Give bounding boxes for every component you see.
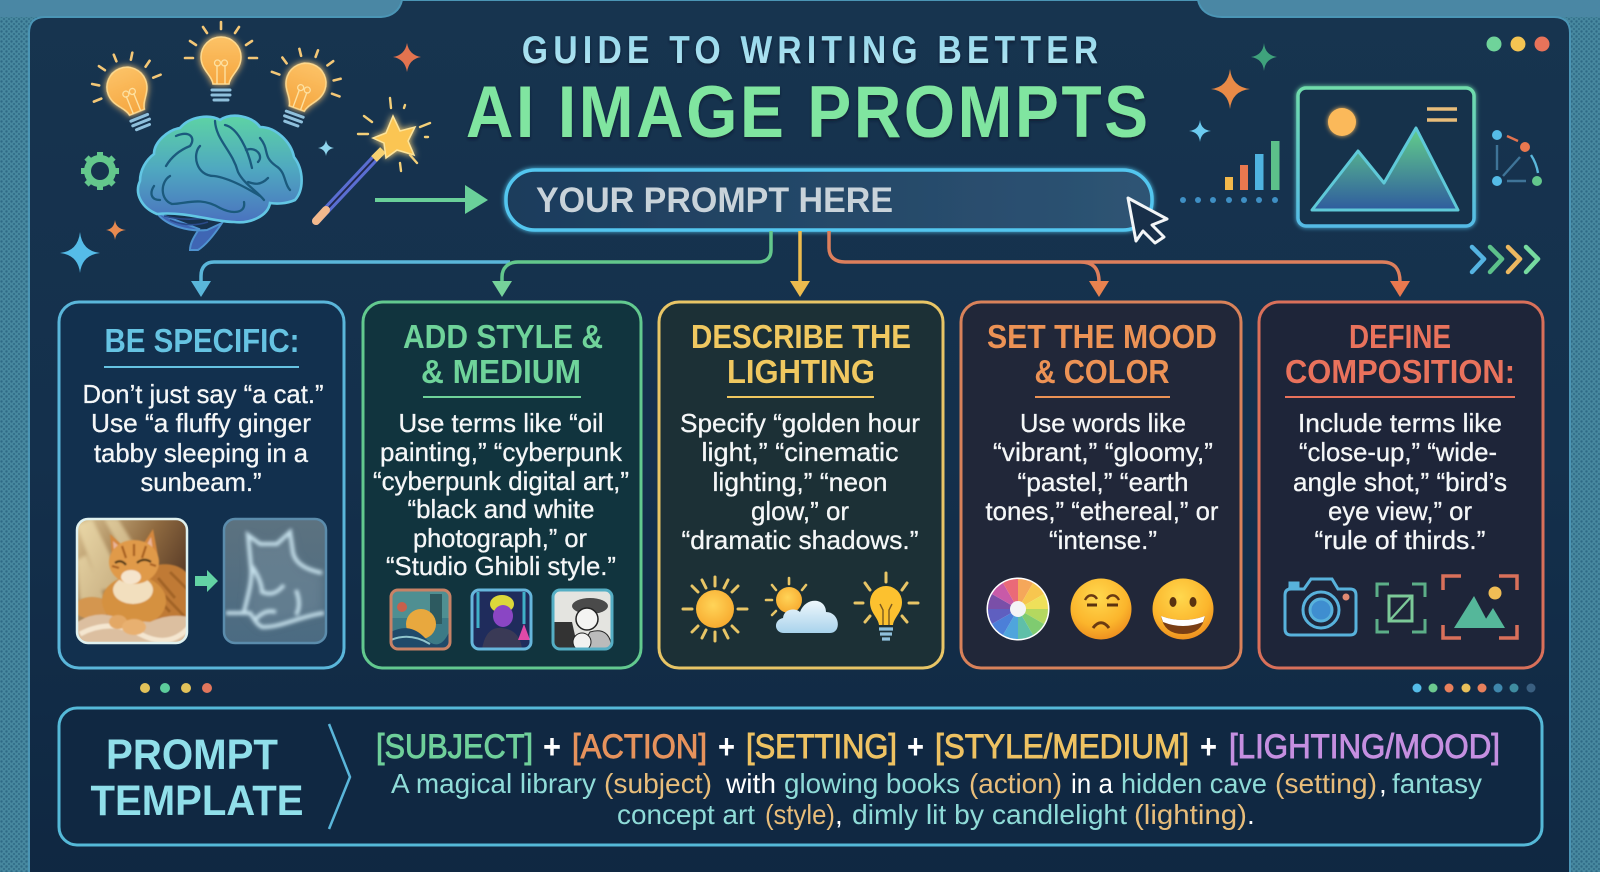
arrow: to prompt bar (375, 185, 488, 214)
body text: Include terms like (1298, 408, 1502, 438)
heading: describe the lighting: LIGHTING (727, 353, 875, 390)
panel: add style and medium (363, 302, 641, 668)
icon: crop frame (1377, 584, 1425, 632)
body text: “vibrant,” “gloomy,” (993, 437, 1213, 467)
formula: [LIGHTING/MOOD] (1229, 728, 1500, 766)
panel: be specific (59, 302, 344, 668)
icon: light bulbs (80, 22, 352, 141)
connector arrow: mood and composition (829, 231, 1410, 297)
icon: sun and cloud (766, 578, 838, 633)
example line two: (style) (765, 799, 835, 830)
body text: lighting,” “neon (712, 467, 888, 497)
image: blurry cat (224, 519, 326, 643)
body text (986, 408, 1219, 555)
icon: lighting bulb (855, 573, 918, 639)
connector arrow: style and medium (492, 231, 771, 297)
example line one: (setting) (1275, 768, 1377, 799)
icon: bar chart (1180, 141, 1280, 203)
body text: “cyberpunk digital art,” (373, 466, 629, 496)
body text: “pastel,” “earth (1018, 467, 1188, 497)
example line one: (subject) (604, 768, 712, 799)
body text: Specify “golden hour (680, 408, 920, 438)
body text: Use “a fluffy ginger (91, 408, 311, 438)
heading: prompt template: PROMPT (106, 731, 278, 779)
example line two (617, 799, 1255, 830)
heading: add style and medium: ADD STYLE & (403, 318, 603, 355)
heading: add style and medium: & MEDIUM (421, 353, 581, 390)
panel: set the mood and color (961, 302, 1241, 668)
connector arrow: be specific (191, 262, 510, 297)
example line one: fantasy (1392, 768, 1482, 799)
icon: chevrons (1472, 247, 1538, 272)
image: ginger cat (74, 519, 192, 645)
decorative dots left (140, 683, 212, 693)
heading: prompt template: TEMPLATE (90, 777, 304, 825)
example line one: hidden cave (1121, 768, 1267, 799)
heading: set the mood and color: & COLOR (1034, 353, 1170, 390)
body text: “Studio Ghibli style.” (386, 551, 616, 581)
image: cyberpunk thumbnail (472, 590, 531, 649)
body text (680, 408, 920, 555)
formula: + (718, 728, 735, 766)
body text: “black and white (408, 494, 594, 524)
formula: [SETTING] (746, 728, 897, 766)
formula: [ACTION] (572, 728, 707, 766)
body text: sunbeam.” (140, 467, 262, 497)
heading: describe the lighting (691, 318, 911, 390)
body text: light,” “cinematic (702, 437, 898, 467)
example line one: A magical library (391, 768, 596, 799)
body text: Don’t just say “a cat.” (82, 379, 324, 409)
prompt text: YOUR PROMPT HERE (536, 181, 893, 220)
panel: prompt template (59, 708, 1542, 845)
heading: define composition: COMPOSITION: (1285, 353, 1515, 390)
body text: “close-up,” “wide- (1299, 437, 1497, 467)
icon: magic wand (316, 98, 430, 221)
icon: camera (1285, 579, 1356, 635)
example line two: concept art (617, 799, 755, 830)
example line two: (lighting) (1134, 799, 1247, 830)
body text: tabby sleeping in a (94, 438, 309, 468)
body text: photograph,” or (413, 523, 587, 553)
example line two: . (1247, 799, 1255, 830)
heading: set the mood and color: SET THE MOOD (987, 318, 1217, 355)
icon: node diagram (1492, 130, 1542, 186)
icon: image frame with mountains (1298, 88, 1474, 226)
body text: “dramatic shadows.” (682, 525, 918, 555)
body text: Use words like (1020, 408, 1186, 438)
formula: [STYLE/MEDIUM] (935, 728, 1189, 766)
body text: tones,” “ethereal,” or (986, 496, 1219, 526)
heading: be specific: BE SPECIFIC: (104, 322, 300, 359)
body text: “rule of thirds.” (1314, 525, 1486, 555)
arrow: cat comparison (195, 570, 218, 592)
window dots (1486, 36, 1550, 52)
icon: sparkles right (1189, 43, 1277, 142)
icon: sparkles left (60, 43, 421, 273)
formula: + (543, 728, 561, 766)
top right tab (1198, 0, 1600, 17)
body text: eye view,” or (1328, 496, 1472, 526)
heading: define composition (1285, 318, 1515, 390)
panel: describe the lighting (659, 302, 943, 668)
image: black and white thumbnail (553, 590, 612, 651)
heading: add style and medium (403, 318, 603, 390)
title: guide to writing better: GUIDE TO WRITING BETTER (522, 28, 1098, 72)
formula: + (907, 728, 924, 766)
example line two: dimly lit by candlelight (852, 799, 1127, 830)
icon: rule of thirds landscape (1443, 576, 1517, 638)
body text (82, 379, 324, 497)
formula: [SUBJECT] (376, 728, 533, 766)
icon: cursor (1128, 198, 1167, 243)
example line two: , (835, 799, 843, 830)
example line one: with (725, 768, 776, 799)
connector arrow: lighting (790, 231, 810, 297)
top left tab (0, 0, 402, 17)
heading: set the mood and color (987, 318, 1217, 390)
title: AI image prompts: AI IMAGE PROMPTS (466, 71, 1148, 153)
image: oil painting thumbnail (391, 590, 450, 649)
example line one: , (1379, 768, 1387, 799)
prompt bar (506, 170, 1152, 230)
example line one: (action) (969, 768, 1062, 799)
example line one: glowing books (784, 768, 960, 799)
body text: “intense.” (1049, 525, 1157, 555)
icon: sun (683, 577, 747, 641)
panel: define composition (1259, 302, 1543, 668)
formula: + (1200, 728, 1217, 766)
icon: happy face (1152, 578, 1214, 640)
body text: Use terms like “oil (398, 408, 604, 438)
body text: angle shot,” “bird’s (1293, 467, 1507, 497)
heading: prompt template (90, 731, 304, 825)
body text (373, 408, 629, 581)
formula (376, 728, 1500, 766)
icon: gloomy face (1070, 578, 1132, 640)
body text: painting,” “cyberpunk (380, 437, 623, 467)
chevron divider (329, 724, 350, 829)
example line one: in a (1071, 768, 1113, 799)
body text: glow,” or (751, 496, 849, 526)
body text (1293, 408, 1507, 555)
example line one (391, 768, 1482, 799)
icon: gear (81, 152, 119, 190)
heading: define composition: DEFINE (1349, 318, 1451, 355)
icon: color wheel (986, 578, 1050, 640)
decorative dots right (1412, 684, 1536, 692)
icon: brain (138, 116, 302, 250)
heading: describe the lighting: DESCRIBE THE (691, 318, 911, 355)
